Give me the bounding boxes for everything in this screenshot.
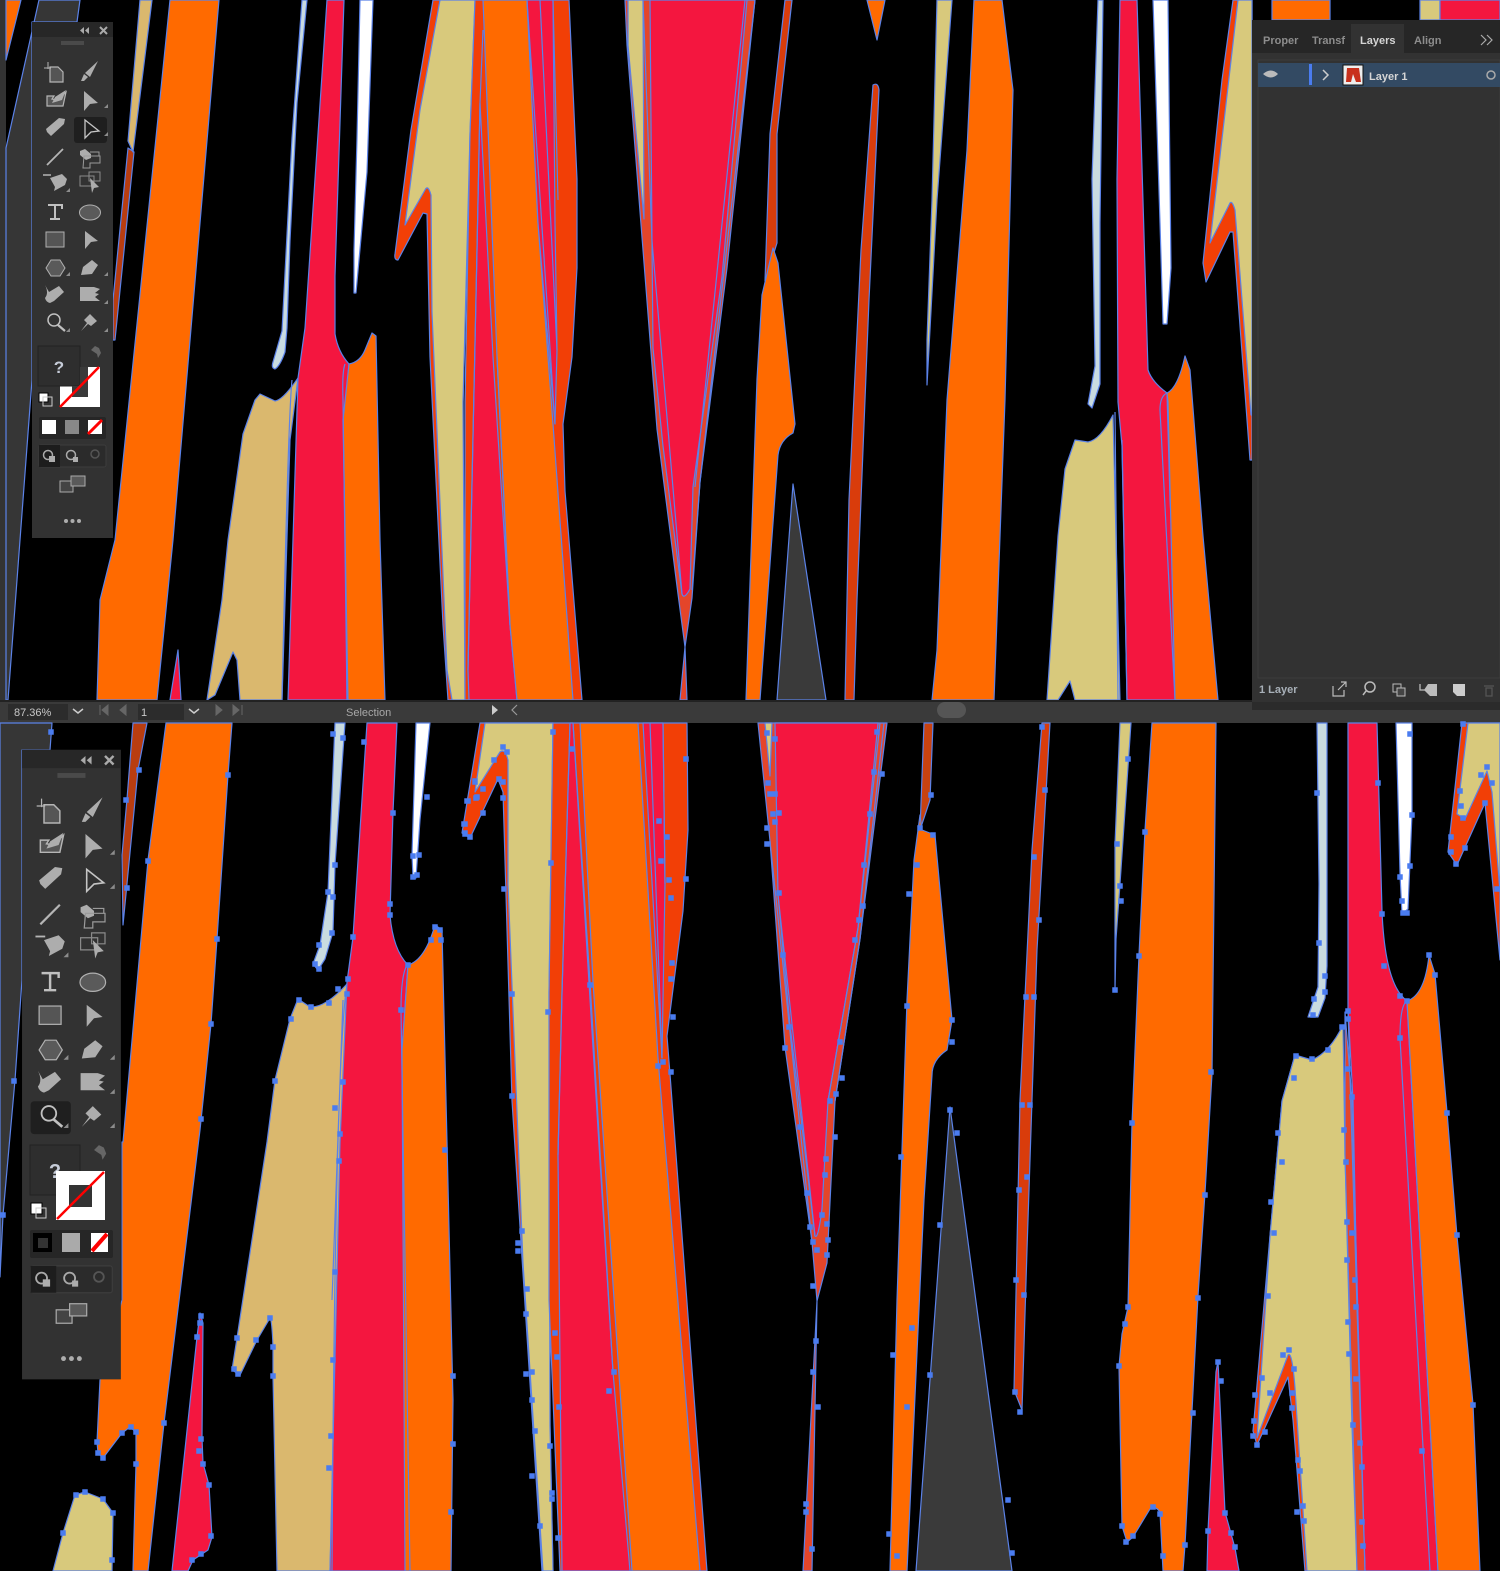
top artwork: [0, 0, 1500, 700]
layers panel: Align: [1414, 35, 1442, 47]
top tools panel: [32, 22, 113, 538]
layers panel: Layer 1: [1369, 71, 1408, 83]
status bar: 87.36%: [14, 707, 52, 719]
anchor points: [3, 724, 1497, 1560]
layers panel: Layers: [1360, 35, 1395, 47]
status bar: 1: [141, 707, 147, 719]
bottom tools panel: [22, 750, 121, 1379]
layers panel: Transf: [1312, 35, 1345, 47]
status bar: [0, 700, 1500, 723]
top tools panel: ?: [54, 358, 64, 377]
layers panel: [1252, 20, 1500, 710]
status bar: Selection: [346, 707, 391, 719]
bottom artwork: [0, 723, 1500, 1571]
bottom tools panel: ?: [49, 1161, 61, 1183]
layers panel: 1 Layer: [1259, 684, 1298, 696]
layers panel: Proper: [1263, 35, 1299, 47]
